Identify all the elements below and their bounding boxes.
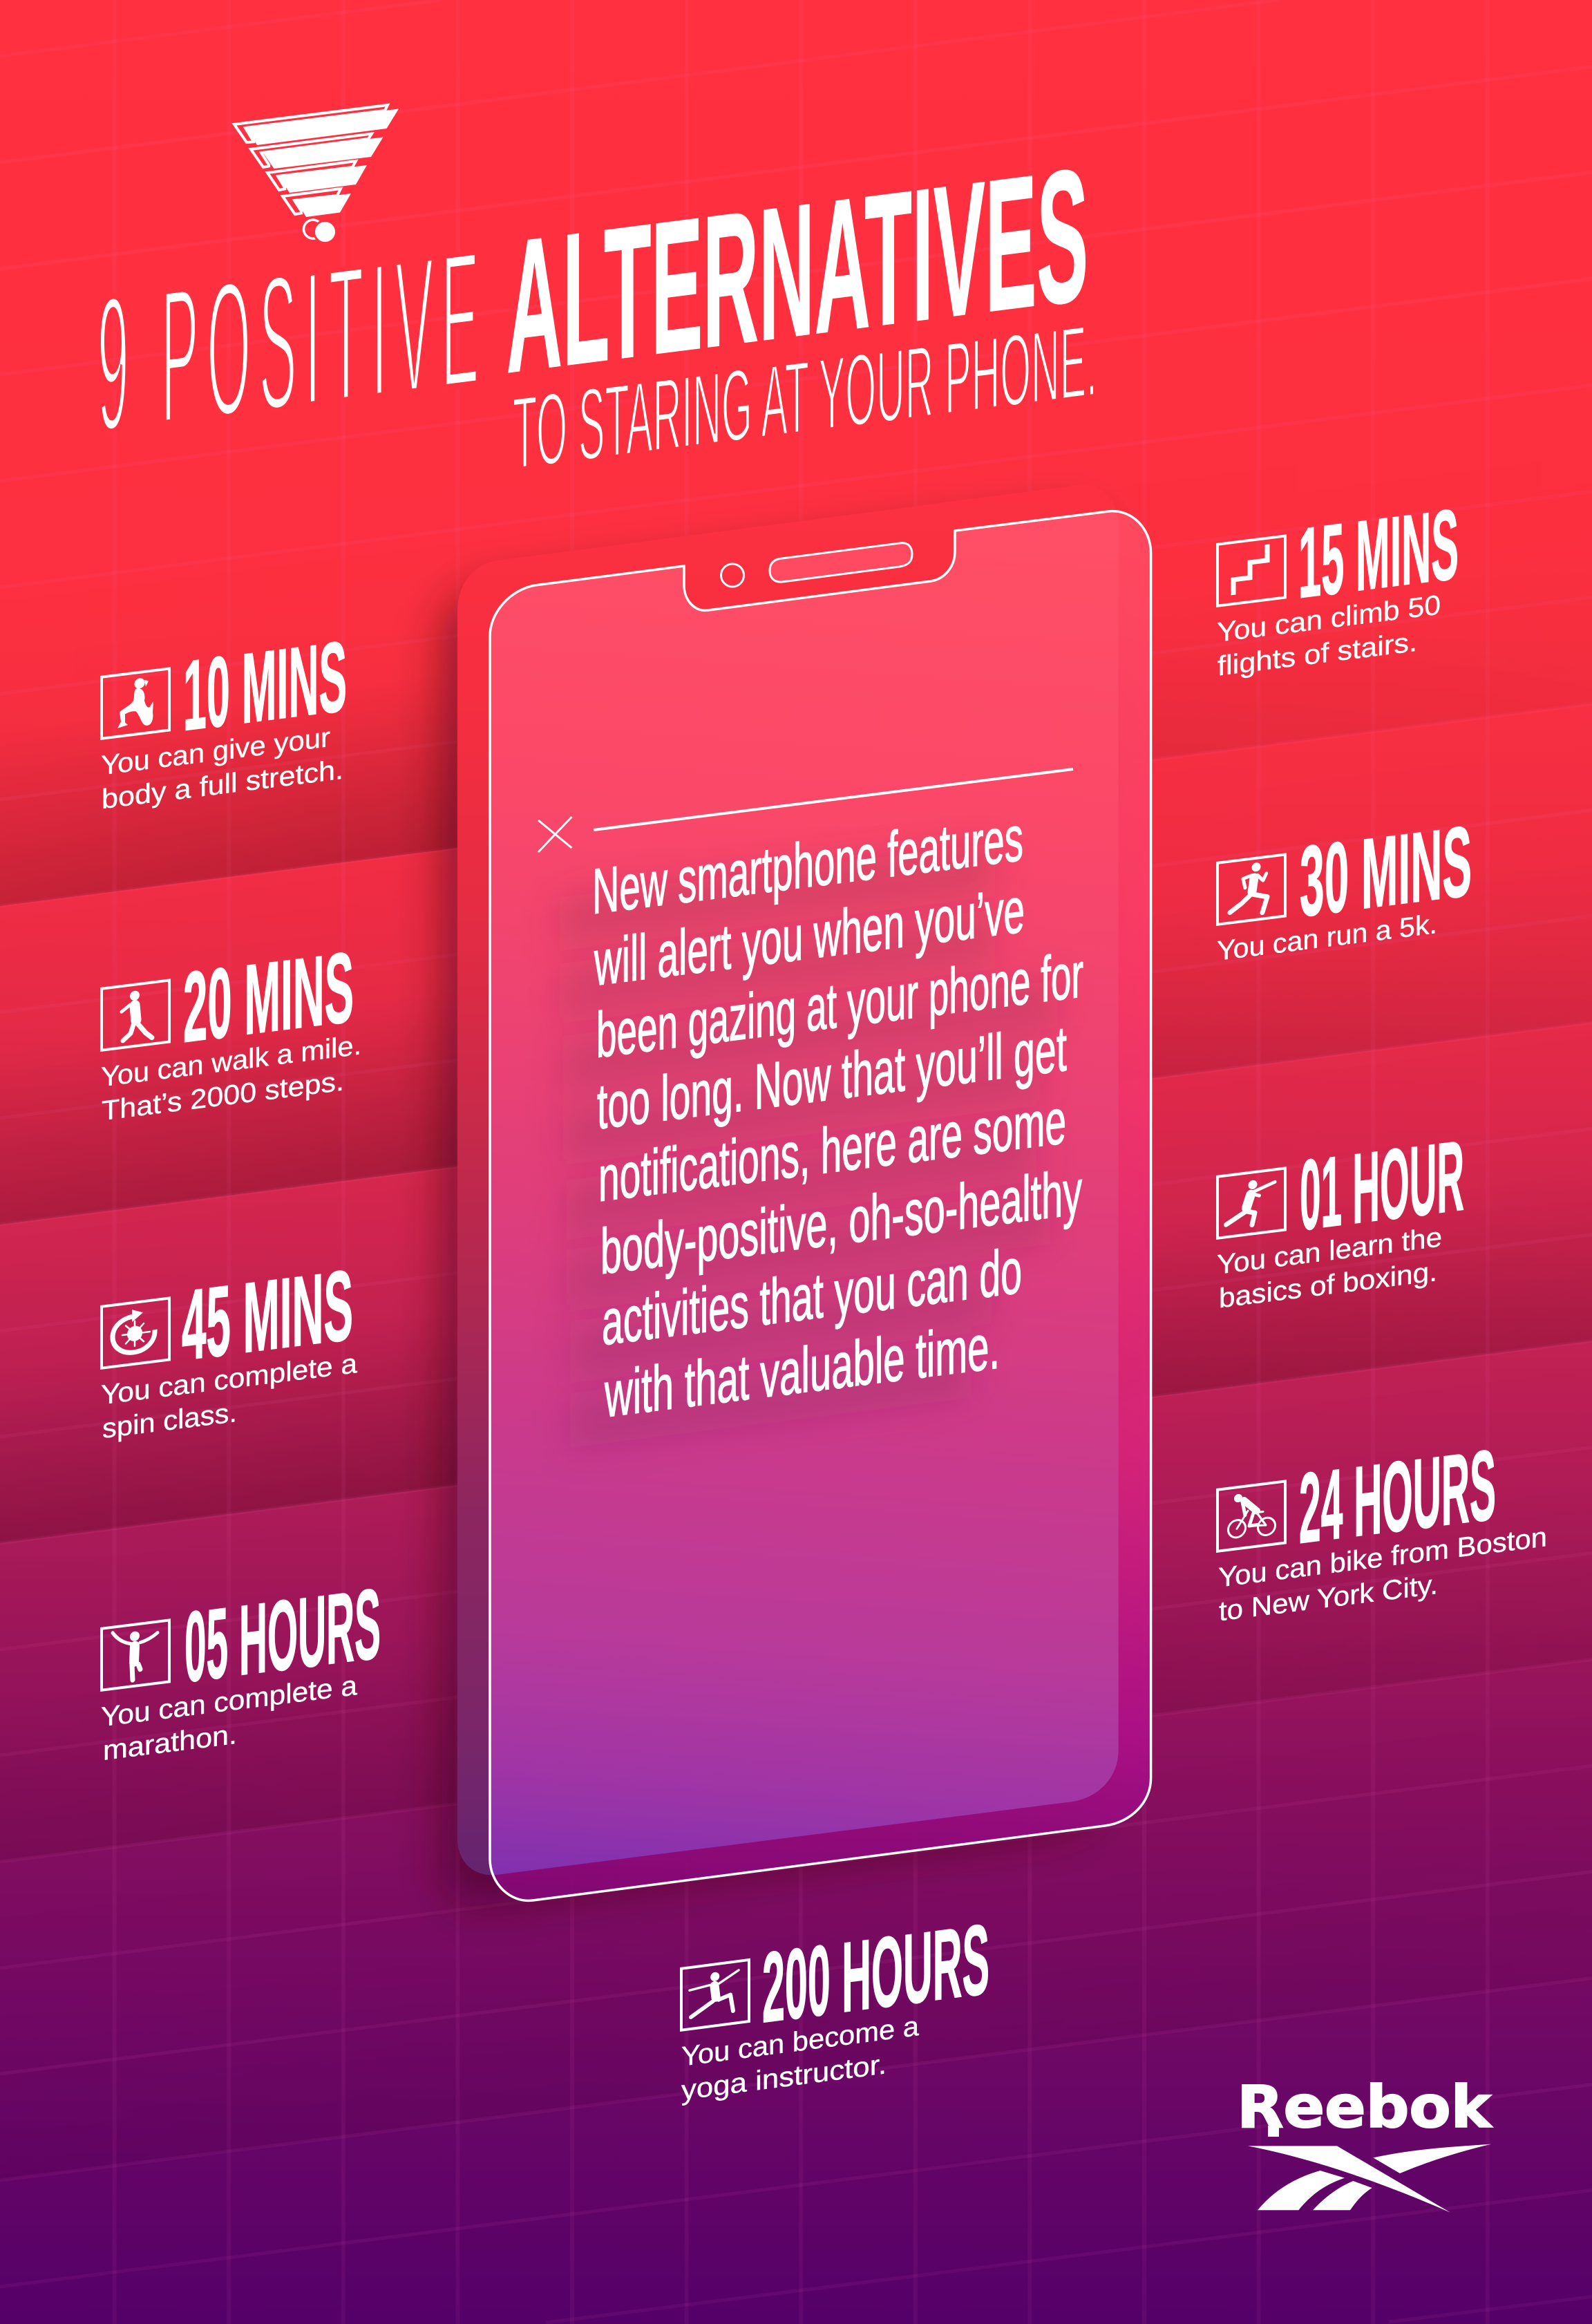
text: 200 HOURS — [762, 1902, 989, 2043]
text: 45 MINS — [182, 1249, 353, 1381]
item: 200 hours: yoga instructor. — [681, 2048, 887, 2106]
item: 30 mins: You can run a 5k. — [1217, 908, 1437, 967]
phone — [457, 485, 1151, 1900]
notch: camera — [721, 564, 743, 587]
text shadow — [560, 835, 1057, 1449]
item: 24 hours — [1217, 1422, 1547, 1627]
item: 05 hours: marathon. — [103, 1719, 237, 1766]
item: 15 mins — [1217, 488, 1459, 682]
item: 200 hours — [681, 1902, 989, 2106]
item: 01 hour — [1217, 1120, 1464, 1314]
icon: close x — [538, 817, 572, 852]
reebok logo — [1237, 2073, 1492, 2213]
title — [97, 127, 1097, 544]
item: 05 hours: You can complete a — [101, 1670, 358, 1732]
delta mark — [1248, 2144, 1491, 2213]
icon: boxer — [1217, 1168, 1285, 1238]
wordmark: Reebok — [1237, 2073, 1492, 2141]
text: 20 MINS — [183, 931, 354, 1064]
item: 15 mins: You can climb 50 — [1217, 589, 1441, 648]
title: 9 POSITIVE — [97, 209, 487, 472]
item: 10 mins: You can give your — [101, 721, 330, 781]
item: 10 mins: body a full stretch. — [102, 754, 343, 815]
phone body text: notifications, here are some — [598, 1084, 1066, 1215]
phone screen — [491, 656, 1118, 1876]
icon: stretch — [102, 669, 169, 739]
icon: walk — [102, 980, 169, 1050]
text: 10 MINS — [183, 620, 347, 752]
icon: funnel logo — [234, 105, 399, 243]
phone body text — [592, 794, 1083, 1433]
phone outline — [490, 511, 1151, 1900]
phone translucent edge — [490, 511, 1151, 1900]
item: 24 hours: You can bike from Boston — [1218, 1521, 1547, 1594]
item: 15 mins: flights of stairs. — [1217, 626, 1417, 682]
item: 01 hour: basics of boxing. — [1219, 1256, 1437, 1314]
phone back layer — [457, 485, 1119, 1875]
item: 200 hours: You can become a — [681, 2010, 920, 2072]
divider line — [594, 769, 1073, 830]
icon: spin class — [102, 1298, 169, 1368]
item: 45 mins: You can complete a — [101, 1348, 358, 1410]
item: 20 mins: That’s 2000 steps. — [102, 1066, 344, 1126]
icon: yoga pose — [681, 1960, 749, 2030]
phone shadow — [442, 516, 1103, 1905]
item: 30 mins — [1217, 804, 1472, 967]
item: 45 mins: spin class. — [102, 1397, 237, 1444]
item: 24 hours: to New York City. — [1219, 1569, 1438, 1627]
wordmark r tail — [1268, 2126, 1279, 2137]
phone body text: with that valuable time. — [604, 1309, 1000, 1431]
item: 01 hour: You can learn the — [1217, 1221, 1442, 1281]
text: 05 HOURS — [184, 1567, 381, 1703]
item: 05 hours — [101, 1567, 381, 1766]
phone body text: New smartphone features — [592, 802, 1023, 927]
icon: cyclist — [1217, 1482, 1285, 1551]
item: 20 mins — [101, 929, 361, 1126]
phone body text: too long. Now that you’ll get — [597, 1012, 1067, 1143]
phone body text: activities that you can do — [602, 1234, 1022, 1359]
icon: stairs — [1217, 536, 1285, 606]
icon: marathon runner — [102, 1620, 169, 1690]
notch: speaker — [770, 543, 912, 582]
item: 10 mins — [101, 620, 347, 815]
phone body text: will alert you when you’ve — [594, 873, 1025, 999]
icon: runner — [1217, 854, 1285, 925]
item: 20 mins: You can walk a mile. — [101, 1029, 361, 1093]
phone body text: body-positive, oh-so-healthy — [600, 1155, 1082, 1287]
phone body text: been gazing at your phone for — [596, 938, 1083, 1071]
item: 45 mins — [101, 1248, 358, 1444]
